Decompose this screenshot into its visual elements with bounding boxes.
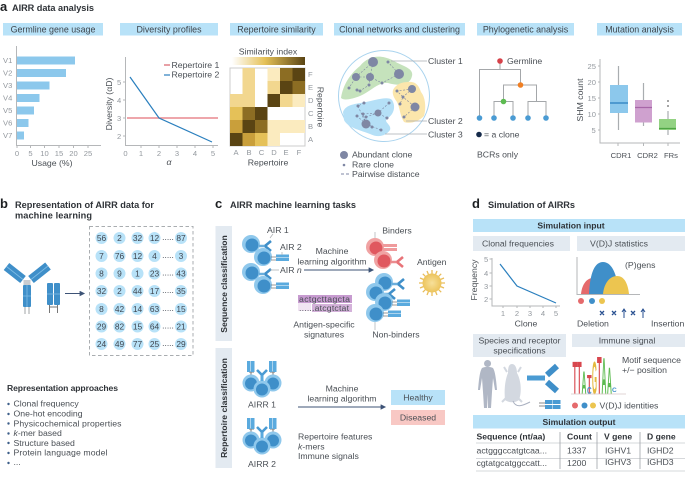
repertoire features text: Immune signals	[298, 451, 359, 461]
clonal frequencies heading	[473, 236, 570, 251]
output table: IGHD3	[647, 457, 674, 467]
repertoire features text: k-mers	[298, 442, 325, 452]
sequence classification side label	[216, 226, 232, 341]
species and receptor heading	[473, 334, 566, 357]
non-binders	[366, 273, 420, 340]
sequence motif logo: C	[612, 387, 617, 394]
antigen-specific signatures: ......atcgtctat	[299, 303, 350, 313]
line chart: clonal frequency: Clone	[515, 318, 538, 328]
panel b: representation of AIRR data: machine learning	[15, 210, 92, 220]
bar chart: germline usage: 0	[15, 149, 19, 158]
arrow to matrix	[65, 292, 84, 294]
bar chart: germline usage: V4	[3, 94, 12, 102]
bar chart: germline usage: 25	[84, 149, 92, 158]
binders: Binders	[382, 226, 412, 236]
simulation output heading	[473, 415, 685, 428]
sequence motif logo: T	[597, 346, 602, 407]
repertoire features text	[298, 432, 373, 461]
line chart: clonal frequency: 3	[484, 282, 488, 291]
line chart: clonal frequency: 4	[484, 269, 488, 278]
network diagram: clonal clusters: Pairwise distance	[352, 169, 420, 179]
bar chart: germline usage: V5	[3, 106, 12, 115]
input receptor cells: AIR n	[280, 265, 302, 275]
sequence motif logo: A	[602, 346, 606, 405]
output table: D gene	[647, 432, 676, 442]
icon: receptors	[527, 366, 560, 409]
bar chart: germline usage: V2	[3, 68, 12, 78]
VDJ statistics chart: Insertion	[651, 318, 684, 328]
number matrix	[90, 226, 193, 356]
sequence classification side label: Sequence classification	[219, 235, 229, 333]
heatmap: repertoire similarity: C	[259, 148, 265, 157]
line chart: diversity profiles: 5	[117, 78, 121, 87]
output table: 1337	[567, 446, 586, 456]
line chart: diversity profiles	[104, 57, 219, 167]
diseased label	[391, 410, 445, 425]
network diagram: clonal clusters	[338, 50, 463, 179]
immune signal heading: Immune signal	[599, 336, 655, 346]
sequence motif logo: Motif sequence	[622, 355, 681, 365]
VDJ statistics chart: Deletion	[577, 318, 609, 328]
repertoire similarity heading	[230, 23, 323, 36]
binders	[366, 226, 412, 269]
representation approaches list: Structure based	[14, 438, 75, 448]
output table: Count	[567, 432, 592, 442]
panel c title: AIRR machine learning tasks	[230, 200, 356, 210]
output table: IGHV3	[605, 457, 631, 467]
heatmap: repertoire similarity: Similarity index	[239, 46, 298, 56]
output table: IGHD2	[647, 446, 674, 456]
panel b title: Representation of AIRR data for	[15, 200, 154, 210]
number matrix: 8	[99, 268, 104, 278]
number matrix: 49	[115, 339, 124, 349]
network diagram: clonal clusters: Cluster 2	[428, 116, 463, 126]
line chart: clonal frequency: 5	[484, 255, 488, 264]
phylogenetic analysis heading: Phylogenetic analysis	[483, 24, 569, 34]
number matrix: 21	[176, 322, 186, 332]
number matrix: 12	[133, 251, 142, 261]
number matrix: 63	[150, 304, 159, 314]
heatmap: repertoire similarity: F	[297, 148, 302, 157]
line chart: clonal frequency: 3	[528, 309, 532, 318]
heatmap: repertoire similarity: C	[308, 109, 314, 118]
input receptor cells: AIR 2	[280, 242, 302, 252]
box plot: mutation analysis	[575, 59, 680, 160]
box plot: mutation analysis: SHM count	[575, 78, 585, 121]
panel a title: AIRR data analysis	[12, 3, 94, 13]
phylogenetic tree: BCRs only	[477, 150, 519, 160]
germline gene usage heading: Germline gene usage	[11, 24, 95, 34]
icon: antigen	[417, 257, 447, 296]
box plot: mutation analysis: 5	[592, 126, 596, 135]
number matrix: 29	[176, 339, 186, 349]
icon: antigen: Antigen	[417, 257, 447, 267]
simulation input heading: Simulation input	[537, 220, 605, 230]
input receptor cells: AIR 1	[267, 225, 289, 235]
number matrix: 17	[150, 286, 159, 296]
number matrix: .....	[162, 268, 174, 278]
number matrix: .....	[162, 303, 174, 313]
number matrix: 87	[176, 233, 186, 243]
VDJ statistics heading	[577, 236, 685, 251]
line chart: diversity profiles: 3	[175, 149, 179, 158]
heatmap: repertoire similarity: Repertoire	[248, 158, 288, 168]
antigen-specific signatures: actgcttagcta	[299, 294, 350, 304]
VDJ statistics chart	[577, 257, 684, 328]
diversity profiles heading: Diversity profiles	[136, 24, 202, 34]
heatmap: repertoire similarity: F	[308, 70, 313, 79]
box plot: mutation analysis: 20	[588, 78, 596, 87]
representation approaches list	[7, 383, 122, 467]
sequence motif logo: A	[582, 365, 586, 401]
line chart: clonal frequency: 1	[501, 309, 505, 318]
sequence motif logo: G	[592, 353, 597, 405]
number matrix: .....	[162, 320, 174, 330]
bar chart: germline usage: V1	[3, 56, 12, 65]
output table: Sequence (nt/aa)	[476, 432, 545, 442]
simulation input heading	[473, 219, 685, 232]
box plot: mutation analysis: 15	[588, 94, 596, 103]
icon: antibody and receptor	[6, 266, 60, 314]
output table	[476, 432, 685, 471]
clonal frequencies heading: Clonal frequencies	[482, 238, 555, 248]
number matrix: 15	[133, 322, 142, 332]
antigen-specific signatures: Antigen-specific	[293, 320, 355, 330]
panel b: representation of AIRR data	[0, 196, 193, 467]
panel d: simulation of AIRRs	[469, 196, 685, 471]
line chart: clonal frequency: 5	[554, 309, 558, 318]
representation approaches list: Protein language model	[14, 448, 108, 458]
repertoire 2 cells	[242, 418, 282, 469]
line chart: diversity profiles: Repertoire 1	[172, 60, 219, 70]
number matrix: 2	[117, 233, 122, 243]
box plot: mutation analysis: 25	[588, 62, 596, 71]
arrow: sequence ML algorithm	[297, 246, 373, 270]
species and receptor heading: Species and receptor	[478, 336, 561, 346]
repertoire 1 cells: AIRR 1	[248, 400, 276, 410]
sequence motif logo: T	[572, 354, 577, 405]
VDJ statistics chart: (P)gens	[625, 260, 656, 270]
number matrix: 4	[152, 251, 157, 261]
diseased label: Diseased	[400, 412, 436, 422]
clonal networks heading: Clonal networks and clustering	[339, 24, 460, 34]
output table: cgtatgcatggccatt...	[476, 458, 547, 468]
number matrix: .....	[162, 250, 174, 260]
line chart: diversity profiles: 0	[123, 149, 128, 158]
line chart: diversity profiles: Diversity (αD)	[104, 77, 114, 130]
line chart: diversity profiles: 4	[193, 149, 197, 158]
mutation analysis heading	[597, 23, 682, 36]
diversity profiles heading	[120, 23, 218, 36]
bar chart: germline usage: 5	[28, 149, 33, 158]
line chart: diversity profiles: 2	[117, 132, 121, 141]
number matrix: .....	[162, 232, 174, 242]
number matrix: 35	[176, 286, 186, 296]
box plot: mutation analysis: 10	[588, 110, 596, 119]
network diagram: clonal clusters: Cluster 3	[428, 130, 463, 140]
number matrix: 76	[115, 251, 124, 261]
line chart: diversity profiles: 2	[157, 149, 161, 158]
heatmap: repertoire similarity: D	[308, 96, 314, 105]
number matrix: 3	[179, 251, 184, 261]
sequence motif logo: T	[577, 354, 582, 405]
output table: actgggccatgtcaa...	[476, 446, 547, 456]
arrow: repertoire ML algorithm: Machine	[326, 384, 359, 394]
representation approaches list: Clonal frequency	[14, 398, 79, 408]
heatmap: repertoire similarity: D	[271, 148, 277, 157]
number matrix: 77	[133, 339, 142, 349]
heatmap: repertoire similarity: E	[308, 83, 313, 92]
repertoire 1 cells	[242, 361, 282, 410]
number matrix: 24	[97, 339, 106, 349]
panel letter b: b	[0, 196, 8, 211]
VDJ statistics heading: V(D)J statistics	[590, 238, 649, 248]
line chart: clonal frequency: Frequency	[469, 259, 479, 301]
line chart: diversity profiles: 4	[117, 96, 121, 105]
number matrix: 8	[99, 304, 104, 314]
line chart: diversity profiles: 5	[211, 149, 215, 158]
network diagram: clonal clusters: Cluster 1	[428, 56, 463, 66]
phylogenetic tree	[476, 56, 549, 160]
icon: mouse	[502, 364, 530, 406]
number matrix: 23	[150, 268, 159, 278]
bar chart: germline usage	[3, 46, 101, 168]
icon: human	[478, 360, 497, 408]
bar chart: germline usage: V6	[3, 118, 12, 128]
repertoire 2 cells: AIRR 2	[248, 459, 276, 469]
line chart: diversity profiles: 1	[139, 149, 143, 158]
immune signal heading	[572, 334, 685, 347]
healthy label	[391, 390, 445, 405]
line chart: clonal frequency	[469, 255, 560, 328]
number matrix: 12	[150, 233, 159, 243]
network diagram: clonal clusters: Abundant clone	[352, 150, 413, 160]
heatmap: repertoire similarity: A	[308, 135, 314, 144]
number matrix: 29	[97, 322, 106, 332]
heatmap: repertoire similarity: E	[283, 148, 289, 157]
representation approaches list: Physicochemical properties	[14, 418, 122, 428]
box plot: mutation analysis: CDR2	[637, 151, 658, 160]
simulation output heading: Simulation output	[542, 417, 616, 427]
number matrix: 44	[133, 286, 142, 296]
species and receptor heading: specifications	[493, 346, 546, 356]
heatmap: repertoire similarity: Repertoire	[316, 87, 326, 127]
number matrix: 2	[117, 286, 122, 296]
arrow: repertoire ML algorithm: learning algorithm	[307, 394, 377, 404]
number matrix: 1	[135, 268, 140, 278]
bar chart: germline usage: V7	[3, 131, 12, 140]
number matrix: 42	[115, 304, 124, 314]
number matrix: 56	[97, 233, 106, 243]
representation approaches list: One-hot encoding	[14, 408, 83, 418]
network diagram: clonal clusters: Rare clone	[352, 160, 394, 170]
repertoire features text: Repertoire features	[298, 432, 373, 442]
line chart: diversity profiles: Repertoire 2	[172, 70, 219, 80]
antigen-specific signatures	[293, 294, 355, 340]
bar chart: germline usage: 15	[55, 149, 63, 158]
number matrix: 14	[133, 304, 142, 314]
input receptor cells	[242, 225, 302, 294]
bar chart: germline usage: Usage (%)	[31, 158, 73, 168]
arrow: sequence ML algorithm: Machine	[316, 246, 349, 256]
non-binders: Non-binders	[372, 330, 420, 340]
heatmap: repertoire similarity: B	[308, 122, 313, 131]
VDJ identities legend: V(D)J identities	[600, 400, 659, 410]
sequence motif logo: A	[607, 361, 612, 402]
sequence motif logo: C	[587, 384, 592, 396]
number matrix: 32	[133, 233, 142, 243]
output table: V gene	[604, 432, 632, 442]
line chart: diversity profiles: α	[167, 157, 173, 167]
sequence motif logo: +/− position	[622, 365, 667, 375]
box plot: mutation analysis: FRs	[664, 151, 678, 160]
bar chart: germline usage: 20	[69, 149, 78, 158]
panel c: AIRR machine learning tasks	[215, 196, 447, 469]
output table: IGHV1	[605, 446, 631, 456]
mutation analysis heading: Mutation analysis	[605, 24, 674, 34]
panel d title: Simulation of AIRRs	[488, 200, 575, 210]
repertoire classification side label: Repertoire classification	[219, 358, 229, 458]
bar chart: germline usage: 10	[40, 149, 49, 158]
panel letter d: d	[472, 196, 480, 211]
sequence motif logo	[571, 346, 681, 407]
healthy label: Healthy	[403, 392, 433, 402]
number matrix: 15	[176, 304, 186, 314]
arrow: sequence ML algorithm: learning algorithm	[297, 256, 367, 266]
repertoire similarity heading: Repertoire similarity	[237, 24, 316, 34]
number matrix: 9	[117, 268, 122, 278]
number matrix: 32	[97, 286, 106, 296]
line chart: clonal frequency: 2	[515, 309, 519, 318]
box plot: mutation analysis: CDR1	[611, 151, 631, 160]
panel a: AIRR data analysis	[0, 0, 682, 179]
arrow: repertoire ML algorithm	[298, 384, 385, 407]
phylogenetic tree: = a clone	[484, 130, 520, 140]
representation approaches list: Representation approaches	[7, 383, 118, 393]
line chart: clonal frequency: 4	[541, 309, 545, 318]
number matrix: .....	[162, 285, 174, 295]
representation approaches list: ...	[14, 457, 21, 467]
line chart: diversity profiles: 3	[117, 114, 121, 123]
heatmap: repertoire similarity	[230, 46, 326, 168]
heatmap: repertoire similarity: B	[246, 148, 252, 157]
VDJ identities legend	[572, 400, 659, 410]
phylogenetic tree: Germline	[507, 56, 542, 66]
number matrix: 7	[99, 251, 104, 261]
bar chart: germline usage: V3	[3, 81, 12, 90]
sequence motif logo: T	[587, 369, 592, 401]
heatmap: repertoire similarity: A	[233, 148, 239, 157]
representation approaches list: k-mer based	[14, 428, 62, 438]
number matrix: 82	[115, 322, 124, 332]
antigen-specific signatures: signatures	[304, 330, 345, 340]
number matrix: 25	[150, 339, 159, 349]
line chart: clonal frequency: 2	[484, 295, 488, 304]
number matrix: 43	[176, 268, 186, 278]
output table: 1200	[567, 458, 586, 468]
number matrix: 64	[150, 322, 159, 332]
repertoire classification side label	[216, 348, 232, 468]
panel letter c: c	[215, 196, 222, 211]
germline gene usage heading	[3, 23, 103, 36]
number matrix: .....	[162, 338, 174, 348]
